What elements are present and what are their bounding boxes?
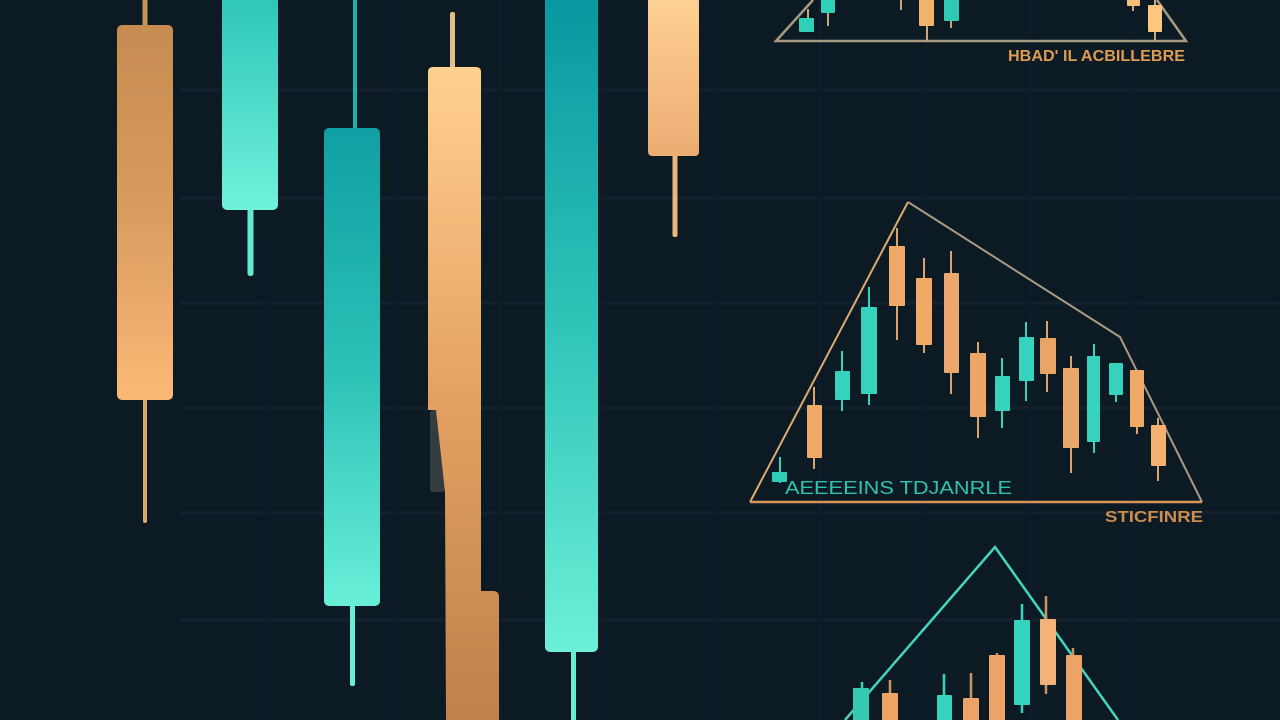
candle: large teal 2 xyxy=(222,0,278,276)
pattern: top triangle (head and shoulders) xyxy=(776,0,1186,65)
triangle outline xyxy=(776,0,1186,41)
candle: large orange 4 with step xyxy=(428,12,499,720)
pattern name: AEEEEINS TDJANRLE xyxy=(785,478,1012,498)
pattern: middle triangle (ascending triangle) xyxy=(750,202,1203,526)
triangle outline xyxy=(845,547,1118,720)
orange bodies xyxy=(807,405,822,458)
candle: large teal 5 xyxy=(545,0,598,720)
large candlesticks xyxy=(117,0,699,720)
triangle outline xyxy=(750,202,908,502)
pattern label: STICFINRE xyxy=(1105,509,1203,526)
teal bodies xyxy=(772,472,787,482)
mini candles xyxy=(772,228,1166,483)
candle: large teal 3 xyxy=(324,0,380,686)
candle: large orange 1 xyxy=(117,0,173,523)
pattern label: HBAD' IL ACBILLEBRE xyxy=(1008,48,1185,65)
wicks xyxy=(814,228,1158,481)
mini candles xyxy=(799,0,1162,41)
mini candles xyxy=(853,596,1082,720)
pattern: bottom triangle xyxy=(845,547,1118,720)
candle: large orange 6 xyxy=(648,0,699,237)
